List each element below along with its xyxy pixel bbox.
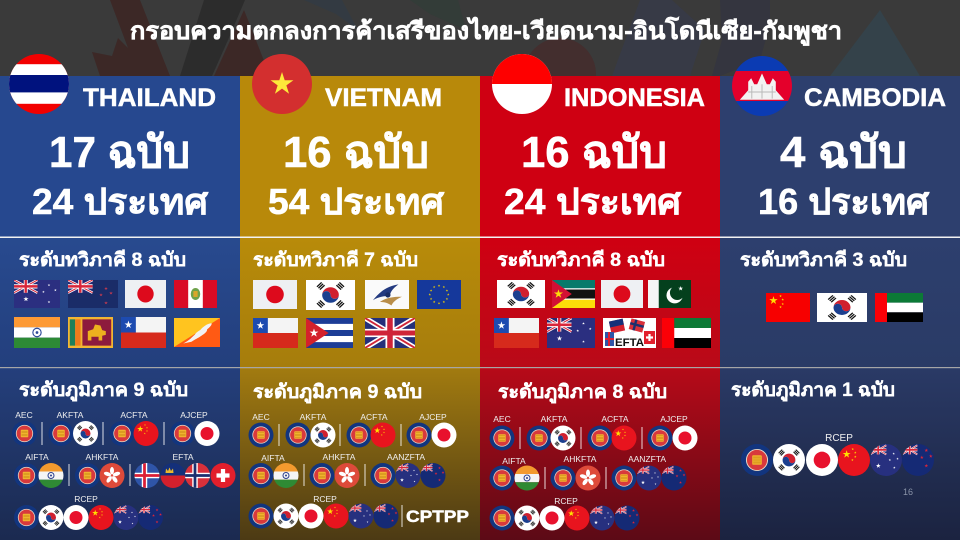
heading: Vietnam regional: ระดับภูมิภาค 9 ฉบับ xyxy=(253,382,422,404)
heading: Indonesia: INDONESIA xyxy=(564,84,705,112)
regional agreements: Thailand: AKFTA xyxy=(57,410,84,420)
regional agreements: Vietnam: RCEP xyxy=(313,494,337,504)
icon: Vietnam flag xyxy=(252,54,312,114)
regional agreements: Indonesia xyxy=(490,414,698,530)
flags: Vietnam bilateral partners xyxy=(253,276,461,348)
panel: Cambodia summary xyxy=(720,76,960,237)
heading: Thailand bilateral: ระดับทวิภาคี 8 ฉบับ xyxy=(19,249,186,271)
panel: Cambodia bilateral xyxy=(720,238,960,367)
regional agreements: Vietnam: AJCEP xyxy=(419,412,447,422)
heading: Cambodia: CAMBODIA xyxy=(804,84,946,112)
heading: Vietnam bilateral: ระดับทวิภาคี 7 ฉบับ xyxy=(253,249,418,271)
stat: Indonesia countries: 24 ประเทศ xyxy=(504,181,682,222)
regional agreements: Vietnam: AANZFTA xyxy=(387,452,425,462)
panel: Indonesia regional xyxy=(480,368,720,540)
regional agreements: Indonesia: AANZFTA xyxy=(628,454,666,464)
stat: Cambodia agreements: 4 ฉบับ xyxy=(780,128,907,177)
top banner background with faded flags xyxy=(0,0,960,110)
regional agreements: Indonesia: ACFTA xyxy=(601,414,629,424)
regional agreements: Vietnam: ACFTA xyxy=(360,412,388,422)
panel: Thailand summary xyxy=(0,76,240,237)
regional agreements: Cambodia xyxy=(741,433,934,476)
regional agreements: Indonesia: AHKFTA xyxy=(564,454,597,464)
title: กรอบความตกลงการค้าเสรีของไทย-เวียดนาม-อินโดนีเซีย-กัมพูชา xyxy=(130,16,842,46)
regional agreements: Vietnam: AIFTA xyxy=(261,453,285,463)
stat: Thailand countries: 24 ประเทศ xyxy=(32,181,209,222)
regional agreements: Thailand: AEC xyxy=(15,410,33,420)
regional agreements: Thailand: EFTA xyxy=(172,452,194,462)
stat: Thailand agreements: 17 ฉบับ xyxy=(49,128,190,177)
heading: Cambodia regional: ระดับภูมิภาค 1 ฉบับ xyxy=(731,380,895,402)
regional agreements: Thailand: AHKFTA xyxy=(86,452,119,462)
regional agreements: Indonesia: AEC xyxy=(493,414,511,424)
flags: Indonesia bilateral partners xyxy=(494,276,711,349)
panel: Indonesia bilateral xyxy=(480,238,720,367)
regional agreements: Thailand: AIFTA xyxy=(25,452,49,462)
heading: Thailand regional: ระดับภูมิภาค 9 ฉบับ xyxy=(19,380,188,402)
regional agreements: Indonesia: AIFTA xyxy=(502,456,526,466)
stat: Vietnam countries: 54 ประเทศ xyxy=(268,181,445,222)
regional agreements: Vietnam: AEC xyxy=(252,412,270,422)
regional agreements: Thailand: AJCEP xyxy=(180,410,208,420)
stat: Cambodia countries: 16 ประเทศ xyxy=(758,181,930,222)
regional agreements: Thailand: ACFTA xyxy=(120,410,148,420)
stat: Indonesia agreements: 16 ฉบับ xyxy=(521,128,667,177)
flag: EFTA xyxy=(603,318,656,349)
flags: Thailand bilateral partners xyxy=(14,280,220,348)
panel: Indonesia summary xyxy=(480,76,720,237)
heading: Cambodia bilateral: ระดับทวิภาคี 3 ฉบับ xyxy=(740,249,907,271)
regional agreements: Thailand: RCEP xyxy=(74,494,98,504)
regional agreements: Indonesia: RCEP xyxy=(554,496,578,506)
icon: Indonesia flag xyxy=(492,54,552,114)
panel: Thailand regional xyxy=(0,368,240,540)
icon: Cambodia flag xyxy=(732,56,792,116)
panel: Vietnam regional xyxy=(240,368,480,540)
panel: Vietnam summary xyxy=(240,76,480,237)
page number: 16 xyxy=(903,487,913,497)
regional agreements: Thailand xyxy=(12,410,236,530)
flag: EFTA: EFTA xyxy=(615,337,644,349)
flags: Cambodia bilateral partners xyxy=(766,289,923,326)
panel: Cambodia regional xyxy=(720,368,960,540)
regional agreements: Vietnam: AHKFTA xyxy=(323,452,356,462)
regional agreements: Indonesia: AJCEP xyxy=(660,414,688,424)
regional agreements: Indonesia: AKFTA xyxy=(541,414,568,424)
icon: Thailand flag xyxy=(9,54,69,114)
heading: Thailand: THAILAND xyxy=(83,84,216,112)
regional agreements: Vietnam xyxy=(248,412,469,528)
heading: Vietnam: VIETNAM xyxy=(325,84,442,112)
panel: Vietnam bilateral xyxy=(240,238,480,367)
stat: Vietnam agreements: 16 ฉบับ xyxy=(283,128,429,177)
heading: Indonesia regional: ระดับภูมิภาค 8 ฉบับ xyxy=(498,382,667,404)
regional agreements: Vietnam: CPTPP xyxy=(406,507,469,526)
regional agreements: Cambodia: RCEP xyxy=(825,433,853,444)
heading: Indonesia bilateral: ระดับทวิภาคี 8 ฉบับ xyxy=(497,249,665,271)
panel: Thailand bilateral xyxy=(0,238,240,367)
regional agreements: Vietnam: AKFTA xyxy=(300,412,327,422)
